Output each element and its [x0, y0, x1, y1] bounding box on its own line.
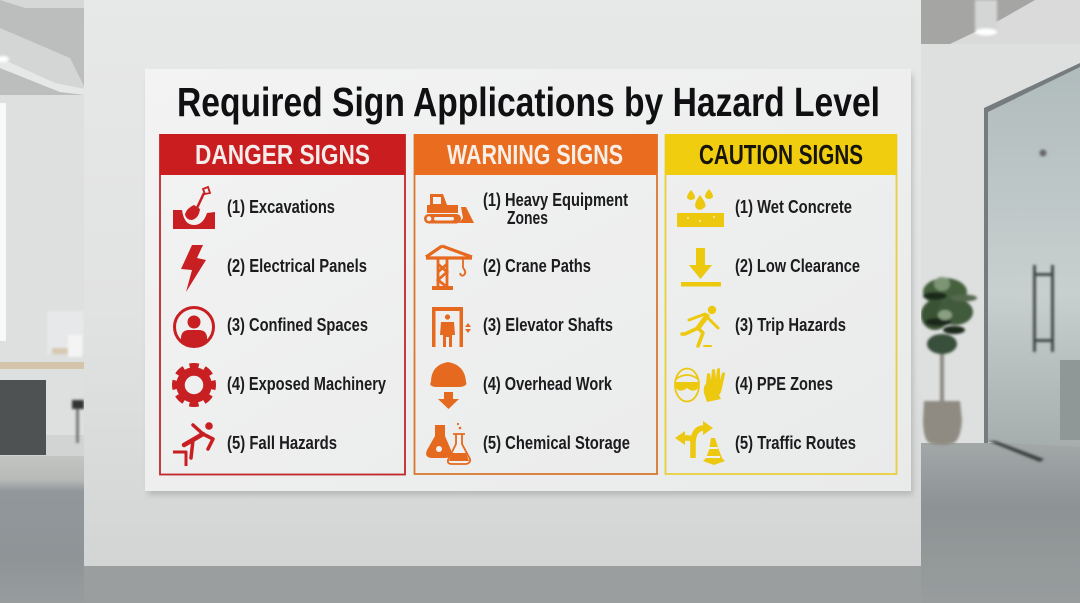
feature wall [84, 0, 921, 566]
sign board shadow [148, 74, 913, 495]
right office view [920, 0, 1080, 603]
icon: excavation shovel [173, 187, 215, 229]
title: Required Sign Applications by Hazard Level [177, 79, 880, 125]
text: electrical panels: (2) Electrical Panels [227, 256, 367, 276]
icon: falling person [173, 422, 213, 466]
text: overhead work: (4) Overhead Work [483, 374, 613, 394]
panel: caution signs [665, 134, 897, 474]
icon: elevator shaft [432, 307, 471, 347]
icon: gear [175, 366, 213, 404]
icon: lightning bolt [181, 245, 206, 292]
text: ppe zones: (4) PPE Zones [735, 374, 833, 394]
text: exposed machinery: (4) Exposed Machinery [227, 374, 386, 394]
text: heavy equipment zones: Zones [507, 208, 548, 228]
text: wet concrete: (1) Wet Concrete [735, 197, 852, 217]
warning header: WARNING SIGNS [447, 139, 623, 170]
panel: danger signs [160, 134, 406, 474]
icon: low clearance arrow [681, 248, 721, 286]
left office view [0, 0, 85, 603]
icon: bulldozer [424, 194, 474, 224]
danger header: DANGER SIGNS [195, 139, 370, 170]
icon: chemical flasks [426, 423, 470, 464]
text: elevator shafts: (3) Elevator Shafts [483, 315, 613, 335]
icon: tripping person [682, 306, 718, 346]
text: heavy equipment zones: (1) Heavy Equipment [483, 190, 628, 210]
warning header [414, 134, 658, 175]
icon: hard hat and arrow [430, 362, 466, 409]
icon: person in circle [174, 308, 214, 346]
text: trip hazards: (3) Trip Hazards [735, 315, 846, 335]
text: chemical storage: (5) Chemical Storage [483, 433, 630, 453]
panel: warning signs [414, 134, 658, 474]
icon: face with goggles and glove [675, 368, 725, 402]
floor strip below wall [84, 560, 921, 603]
text: crane paths: (2) Crane Paths [483, 256, 591, 276]
icon: wet concrete [677, 189, 724, 227]
text: heavy equipment zones [483, 190, 628, 228]
icon: tower crane [426, 246, 472, 288]
caution header: CAUTION SIGNS [699, 139, 863, 170]
text: low clearance: (2) Low Clearance [735, 256, 860, 276]
caution header [665, 134, 897, 175]
danger header [160, 134, 406, 175]
text: confined spaces: (3) Confined Spaces [227, 315, 368, 335]
icon: potted plant leaves [921, 277, 977, 354]
text: excavations: (1) Excavations [227, 197, 335, 217]
icon: route arrows and cone [675, 421, 725, 465]
sign board [145, 69, 911, 491]
text: traffic routes: (5) Traffic Routes [735, 433, 856, 453]
text: fall hazards: (5) Fall Hazards [227, 433, 337, 453]
